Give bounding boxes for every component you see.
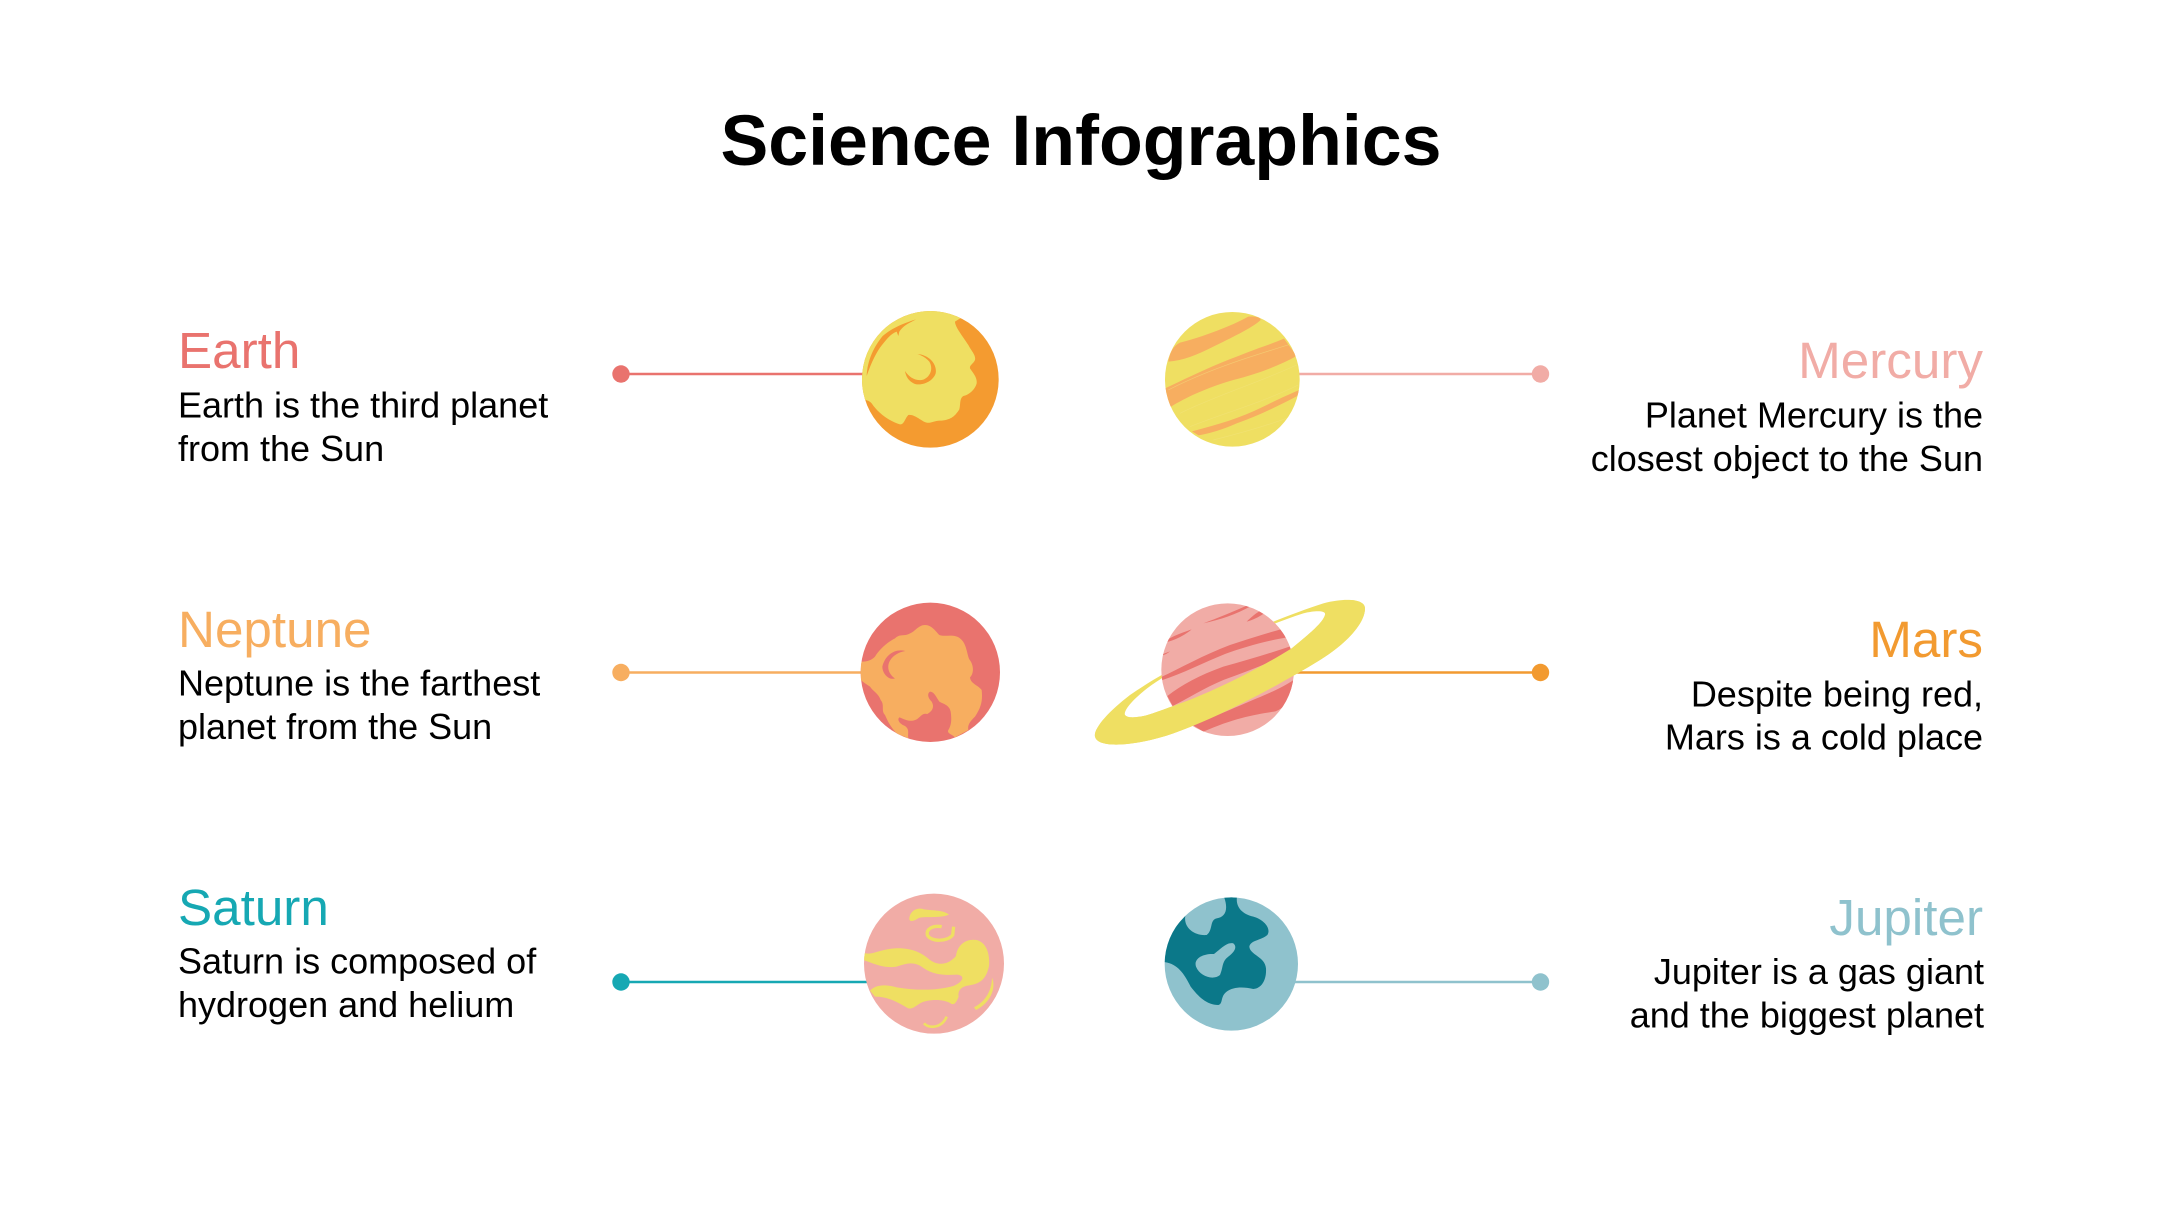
text: Mercury description: Planet Mercury is the xyxy=(1645,394,1983,436)
connector: Saturn xyxy=(612,973,868,991)
heading: Jupiter: Jupiter xyxy=(1829,889,1983,946)
panel: Saturn xyxy=(178,879,1004,1034)
connector: Mars xyxy=(1290,664,1549,681)
text: Jupiter description: Jupiter is a gas giant xyxy=(1654,951,1984,992)
heading: Mercury: Mercury xyxy=(1798,332,1983,389)
heading: Saturn: Saturn xyxy=(178,879,329,936)
connector: Earth xyxy=(612,365,864,383)
heading: Mars: Mars xyxy=(1869,611,1983,668)
text: Jupiter description: and the biggest planet xyxy=(1630,994,1984,1036)
connector: Mercury xyxy=(1295,365,1549,383)
icon: Saturn planet xyxy=(862,894,1004,1034)
text: Mars description: Despite being red, xyxy=(1691,674,1983,714)
icon: Mercury planet xyxy=(1165,312,1300,447)
text: Saturn description: Saturn is composed of xyxy=(178,940,537,982)
connector: Jupiter xyxy=(1295,973,1549,991)
heading: Neptune: Neptune xyxy=(178,601,372,658)
text: Earth description: from the Sun xyxy=(178,428,384,469)
text: Mars description: Mars is a cold place xyxy=(1665,716,1983,758)
text: Saturn description: hydrogen and helium xyxy=(178,984,514,1025)
icon: Mars ringed planet xyxy=(1095,600,1365,745)
text: Mercury description: closest object to the Sun xyxy=(1591,438,1983,479)
text: Neptune description: planet from the Sun xyxy=(178,706,492,747)
text: Earth description: Earth is the third planet xyxy=(178,384,548,426)
panel: Earth xyxy=(178,303,999,469)
panel: Jupiter xyxy=(1157,889,1984,1036)
panel: Mercury xyxy=(1165,312,1983,479)
ring: front arc xyxy=(1095,600,1365,745)
panel: Mars xyxy=(1095,600,1983,758)
connector: Neptune xyxy=(612,664,864,681)
text: Neptune description: Neptune is the farthest xyxy=(178,662,540,704)
icon: Earth planet xyxy=(862,311,999,448)
icon: Jupiter planet xyxy=(1157,895,1298,1031)
heading: Earth: Earth xyxy=(178,322,300,379)
panel: Neptune xyxy=(178,601,1000,747)
title: Science Infographics xyxy=(720,101,1442,181)
icon: Neptune planet xyxy=(858,603,1000,742)
